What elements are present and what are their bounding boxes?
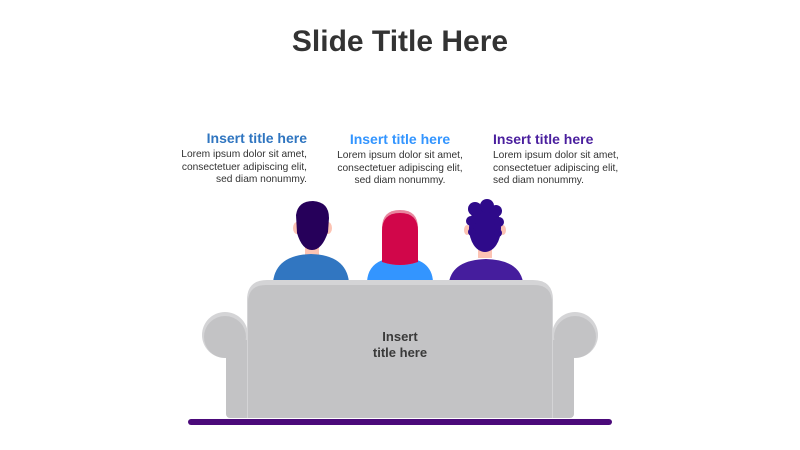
text block: left: Insert title here bbox=[207, 130, 307, 146]
text block: right: consectetuer adipiscing elit, bbox=[493, 163, 618, 174]
text block: right: sed diam nonummy. bbox=[493, 175, 584, 186]
text block: middle: Insert title here bbox=[350, 131, 450, 147]
person: right bbox=[449, 199, 523, 282]
text block: left bbox=[181, 130, 307, 185]
person: left bbox=[273, 201, 349, 282]
floor bar bbox=[188, 419, 612, 425]
text block: left: Lorem ipsum dolor sit amet, bbox=[181, 149, 307, 160]
sofa: title here bbox=[373, 345, 427, 360]
text block: right: Lorem ipsum dolor sit amet, bbox=[493, 150, 619, 161]
title: Slide Title Here bbox=[292, 25, 508, 58]
sofa label: Insert bbox=[382, 329, 418, 344]
person: middle bbox=[367, 210, 433, 282]
text block: right: Insert title here bbox=[493, 131, 593, 147]
text block: left: sed diam nonummy. bbox=[216, 174, 307, 185]
text block: middle: sed diam nonummy. bbox=[354, 175, 445, 186]
text block: left: consectetuer adipiscing elit, bbox=[182, 162, 307, 173]
text block: middle: Lorem ipsum dolor sit amet, bbox=[337, 150, 463, 161]
text block: middle: consectetuer adipiscing elit, bbox=[337, 163, 463, 174]
text block: middle bbox=[337, 131, 463, 186]
sofa bbox=[202, 280, 598, 418]
text block: right bbox=[493, 131, 619, 186]
